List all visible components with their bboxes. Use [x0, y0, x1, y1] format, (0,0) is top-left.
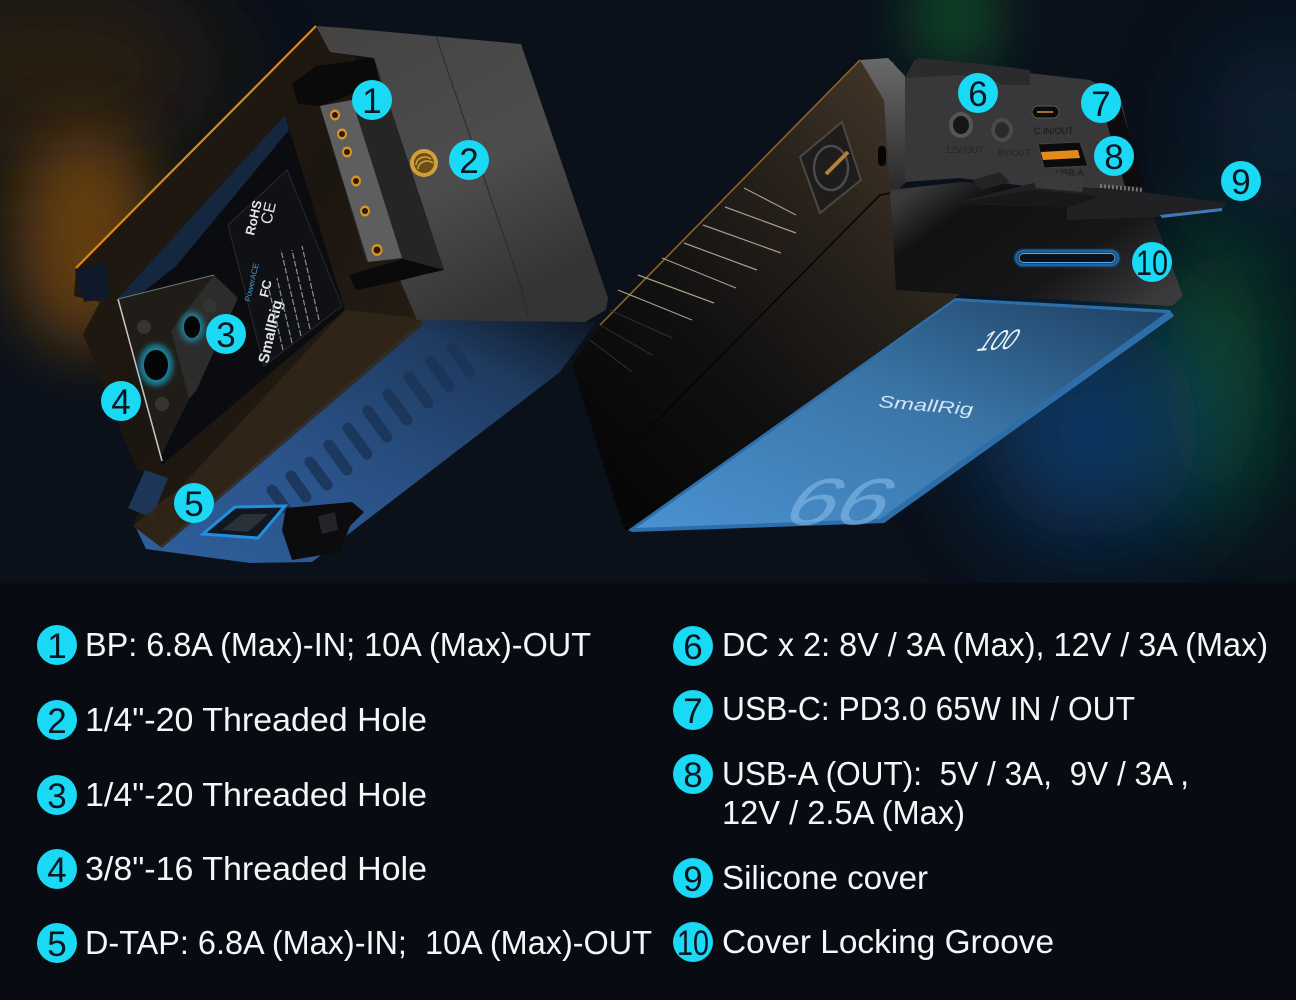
legend item 2: 2 [47, 702, 67, 741]
legend item 8 [673, 754, 1189, 831]
badge 5: 5 [184, 485, 204, 524]
locking groove [1016, 251, 1118, 265]
badge 5 [174, 483, 214, 524]
legend item 7: 7 [683, 692, 703, 731]
legend item 5: 5 [47, 925, 67, 964]
legend item 3: 1/4"-20 Threaded Hole [85, 776, 427, 813]
image badges [101, 73, 1261, 524]
badge 7 [1081, 83, 1121, 124]
top gray face [316, 26, 608, 322]
side slit [911, 134, 919, 154]
RoHS mark: RoHS [242, 198, 265, 237]
legend item 10: 10 [677, 924, 709, 963]
recess blue glint [118, 115, 289, 298]
badge 2: 2 [459, 142, 479, 181]
badge 3: 3 [216, 316, 236, 355]
badge 9: 9 [1231, 163, 1251, 202]
DC port 12V [946, 112, 984, 155]
badge 1 [352, 80, 392, 121]
legend item 6: DC x 2: 8V / 3A (Max), 12V / 3A (Max) [722, 626, 1268, 663]
legend item 8: USB-A (OUT): 5V / 3A, 9V / 3A , [722, 755, 1189, 792]
legend item 10: Cover Locking Groove [722, 923, 1054, 960]
badge 2 [449, 140, 489, 181]
legend item 9: 9 [683, 860, 703, 899]
FC mark: FC [256, 278, 275, 299]
D-TAP cap [282, 502, 364, 560]
lower dark panel [890, 182, 1183, 306]
left battery [74, 26, 608, 563]
badge 4: 4 [111, 383, 131, 422]
badge 6: 6 [968, 75, 988, 114]
blue side panel with vents [136, 318, 596, 563]
battery label [228, 170, 342, 366]
faded capacity number: 99 [771, 464, 914, 538]
blue product name: PowerACE [243, 262, 261, 302]
badge 1: 1 [362, 82, 382, 121]
legend item 4: 3/8"-16 Threaded Hole [85, 850, 427, 887]
front face with orange edge [74, 26, 440, 548]
CE mark: CE [258, 200, 280, 226]
badge 6 [958, 73, 998, 114]
badge 9 [1221, 161, 1261, 202]
gold tripod hole [410, 149, 438, 177]
USB-C port [1032, 106, 1074, 136]
USB-C port: C IN/OUT [1034, 126, 1074, 136]
DC port 12V: 12V/OUT [946, 145, 984, 155]
metal mount plate [117, 275, 238, 461]
badge 8 [1094, 136, 1134, 177]
legend item 3: 3 [47, 777, 67, 816]
battery percent readout: 100 [972, 324, 1025, 358]
seam line [436, 36, 528, 316]
legend item 1: BP: 6.8A (Max)-IN; 10A (Max)-OUT [85, 626, 591, 663]
badge 3 [206, 314, 246, 355]
brand wordmark on display: SmallRig [878, 392, 975, 419]
right battery [572, 58, 1226, 538]
port panel upper [905, 58, 1145, 190]
corner column [860, 58, 906, 190]
power button [800, 122, 861, 213]
badge 10: 10 [1136, 244, 1168, 283]
badge 8: 8 [1104, 138, 1124, 177]
badge 7: 7 [1091, 85, 1111, 124]
legend item 8: 12V / 2.5A (Max) [722, 794, 965, 831]
brand text: SmallRig [255, 299, 286, 365]
photo background [0, 0, 1296, 583]
legend item 7: USB-C: PD3.0 65W IN / OUT [722, 690, 1135, 727]
legend item 9: Silicone cover [722, 859, 928, 896]
legend right column [673, 626, 1268, 963]
silicone cover [955, 172, 1226, 220]
legend item 5: D-TAP: 6.8A (Max)-IN; 10A (Max)-OUT [85, 924, 652, 961]
USB-A port [1038, 142, 1088, 178]
legend item 8: 8 [683, 756, 703, 795]
D-TAP port [203, 506, 285, 538]
side slit [878, 146, 886, 166]
BP plate with pins [292, 58, 444, 290]
badge 4 [101, 381, 141, 422]
legend item 6: 6 [683, 628, 703, 667]
1/4 inch threaded hole on plate [180, 312, 204, 342]
legend item 2: 1/4"-20 Threaded Hole [85, 701, 427, 738]
label fine print [268, 246, 319, 350]
blue display panel [628, 298, 1174, 538]
side face with vents [572, 60, 960, 532]
legend background [0, 583, 1296, 1000]
legend left column [37, 625, 652, 964]
DC port 8V [991, 118, 1031, 158]
legend item 1: 1 [47, 627, 67, 666]
recessed slot [117, 115, 345, 465]
DC port 8V: 8V/OUT [998, 148, 1031, 158]
3/8 inch threaded hole [139, 344, 173, 386]
USB-A port: USB-A [1056, 168, 1084, 178]
legend item 4: 4 [47, 851, 67, 890]
